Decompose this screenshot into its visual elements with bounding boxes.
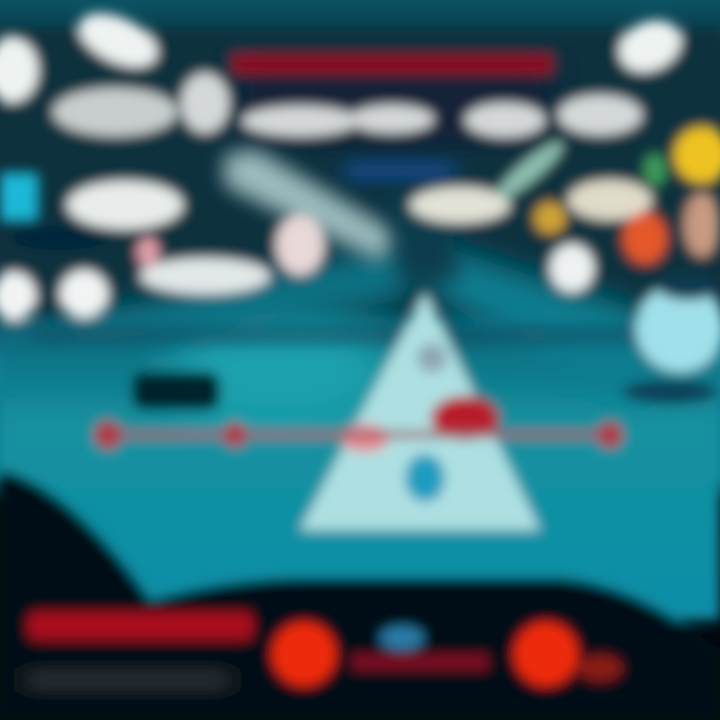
dark label above timeline: [132, 372, 220, 410]
red footer heading: [28, 612, 253, 640]
left labels panel: [0, 150, 400, 320]
white blobs top: [0, 2, 689, 102]
centre blue lamp: [380, 626, 424, 650]
grey footer text: [25, 668, 230, 692]
dashboard dark panel: [0, 470, 720, 720]
central triangle: [300, 292, 540, 530]
right circular icon: [622, 274, 720, 404]
right labels panel: [410, 127, 720, 292]
blue under headline: [345, 160, 455, 182]
title banner: [53, 54, 642, 182]
title dark backing: [240, 55, 550, 145]
white headline: [53, 73, 642, 137]
red light right: [514, 622, 578, 686]
red timeline: [94, 421, 623, 449]
central crossing: [385, 195, 460, 280]
bottom dashboard: [0, 470, 720, 720]
right red glow: [578, 655, 622, 681]
red headline bar: [232, 54, 552, 74]
centre red bar: [352, 654, 488, 670]
red light left: [272, 622, 336, 686]
triangle centre figure: [417, 343, 447, 373]
